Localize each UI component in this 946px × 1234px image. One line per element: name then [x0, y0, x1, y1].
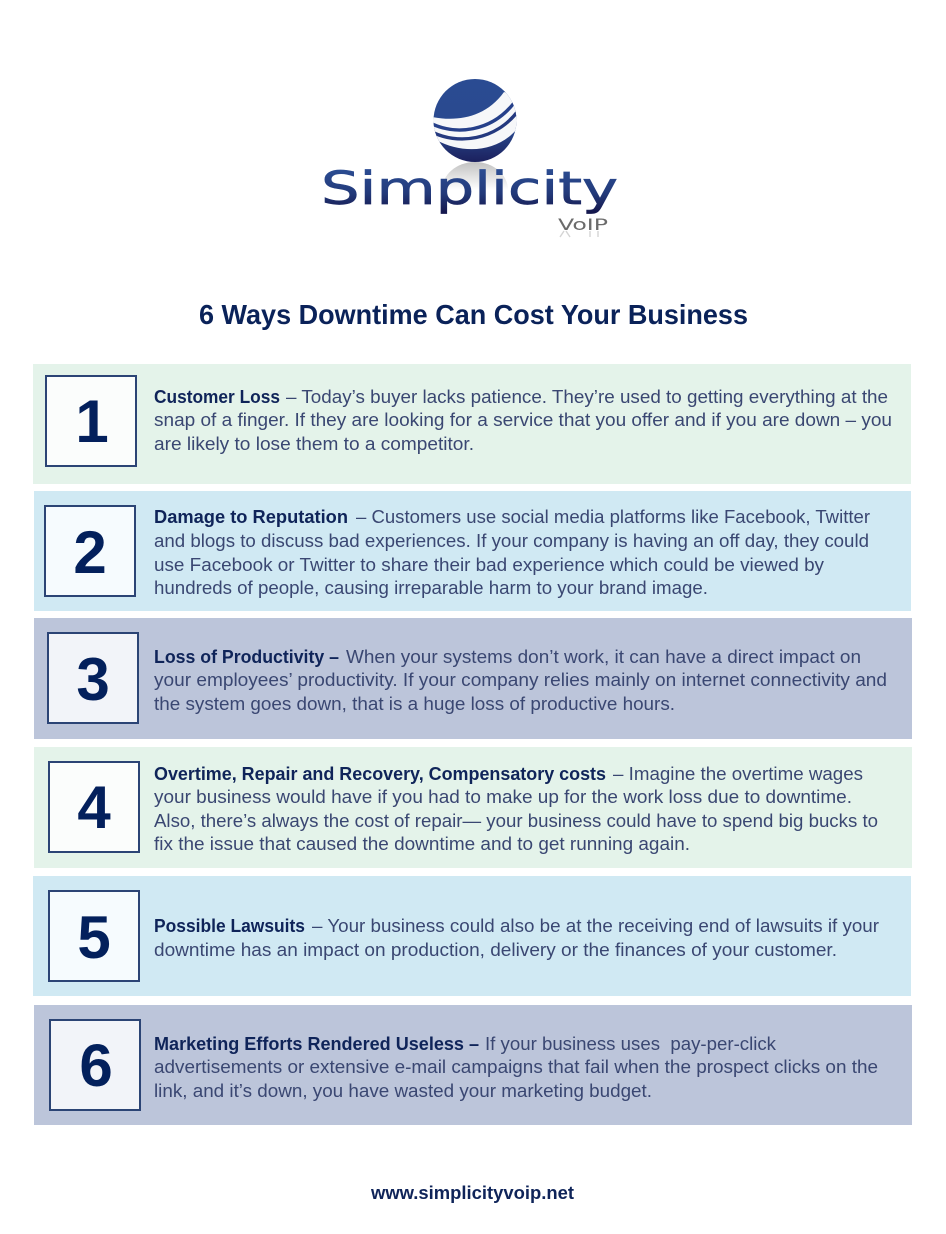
text block 1: Customer Loss: [154, 387, 280, 407]
number box 3: [48, 633, 138, 723]
logo: Simplicity VoIP: [321, 79, 618, 237]
text block 2: use Facebook or Twitter to share their bad experience which could be viewed by: [154, 555, 824, 575]
text block 5: downtime has an impact on production, delivery or the finances of your customer.: [154, 940, 837, 960]
number box 6: 6: [79, 1032, 113, 1099]
panel 4: overtime, repair and recovery: [34, 747, 912, 868]
number box 1: 1: [75, 388, 109, 455]
text block 1: snap of a finger. If they are looking for a service that you offer and if you are down – you: [154, 410, 892, 430]
text block 2: and blogs to discuss bad experiences. If your company is having an off day, they could: [154, 531, 869, 551]
text block 2: hundreds of people, causing irreparable harm to your brand image.: [154, 578, 708, 598]
wordmark: VoIP: VoIP: [558, 215, 609, 234]
panel 1: customer loss: [33, 364, 911, 484]
wordmark: Simplicity: Simplicity: [321, 162, 618, 215]
text block 4: Overtime, Repair and Recovery, Compensatory costs: [154, 764, 606, 784]
text block 2: – Customers use social media platforms like Facebook, Twitter: [356, 507, 870, 527]
text block 4: [154, 764, 878, 854]
panel 5: possible lawsuits: [33, 876, 911, 996]
text block 4: Also, there’s always the cost of repair— your business could have to spend big bucks to: [154, 811, 878, 831]
text block 6: Marketing Efforts Rendered Useless –: [154, 1034, 479, 1054]
number box 6: [50, 1020, 140, 1110]
number box 5: 5: [77, 904, 111, 971]
panel background: [34, 618, 912, 739]
text block 1: [154, 387, 892, 454]
text block 4: – Imagine the overtime wages: [613, 764, 863, 784]
text block 3: When your systems don’t work, it can have a direct impact on: [346, 647, 861, 667]
text block 4: your business would have if you had to make up for the work loss due to downtime.: [154, 787, 852, 807]
text block 5: Possible Lawsuits: [154, 916, 305, 936]
text block 1: are likely to lose them to a competitor.: [154, 434, 474, 454]
text block 4: fix the issue that caused the downtime and to get running again.: [154, 834, 690, 854]
text block 3: your employees’ productivity. If your company relies mainly on internet connectivity and: [154, 670, 887, 690]
panel 6: marketing efforts rendered useless: [34, 1005, 912, 1125]
text block 6: advertisements or extensive e-mail campaigns that fail when the prospect clicks on the: [154, 1057, 878, 1077]
panel 2: damage to reputation: [34, 491, 911, 611]
panel background: [34, 491, 911, 611]
number box 2: [45, 506, 135, 596]
panel background: [34, 747, 912, 868]
text block 1: – Today’s buyer lacks patience. They’re used to getting everything at the: [286, 387, 888, 407]
sphere reflection: [442, 162, 508, 218]
number box 3: 3: [76, 646, 110, 713]
title: 6 Ways Downtime Can Cost Your Business: [199, 299, 748, 330]
icon: striped globe: [434, 79, 516, 162]
footer website: www.simplicityvoip.net: [370, 1183, 574, 1203]
number box 2: 2: [73, 519, 107, 586]
number box 1: [46, 376, 136, 466]
text block 5: [154, 916, 879, 960]
text block 6: [154, 1034, 878, 1101]
text block 2: [154, 507, 870, 598]
panel 3: loss of productivity: [34, 618, 912, 739]
text block 3: the system goes down, that is a huge loss of productive hours.: [154, 694, 675, 714]
panel background: [33, 876, 911, 996]
text block 5: – Your business could also be at the receiving end of lawsuits if your: [312, 916, 879, 936]
panel background: [33, 364, 911, 484]
panel background: [34, 1005, 912, 1125]
number box 4: [49, 762, 139, 852]
text block 6: link, and it’s down, you have wasted your marketing budget.: [154, 1081, 652, 1101]
text block 3: [154, 647, 887, 714]
text block 3: Loss of Productivity –: [154, 647, 339, 667]
VoIP reflection: [560, 231, 598, 237]
text block 2: Damage to Reputation: [154, 507, 348, 527]
number box 5: [49, 891, 139, 981]
text block 6: If your business uses pay-per-click: [485, 1034, 777, 1054]
number box 4: 4: [77, 774, 111, 841]
